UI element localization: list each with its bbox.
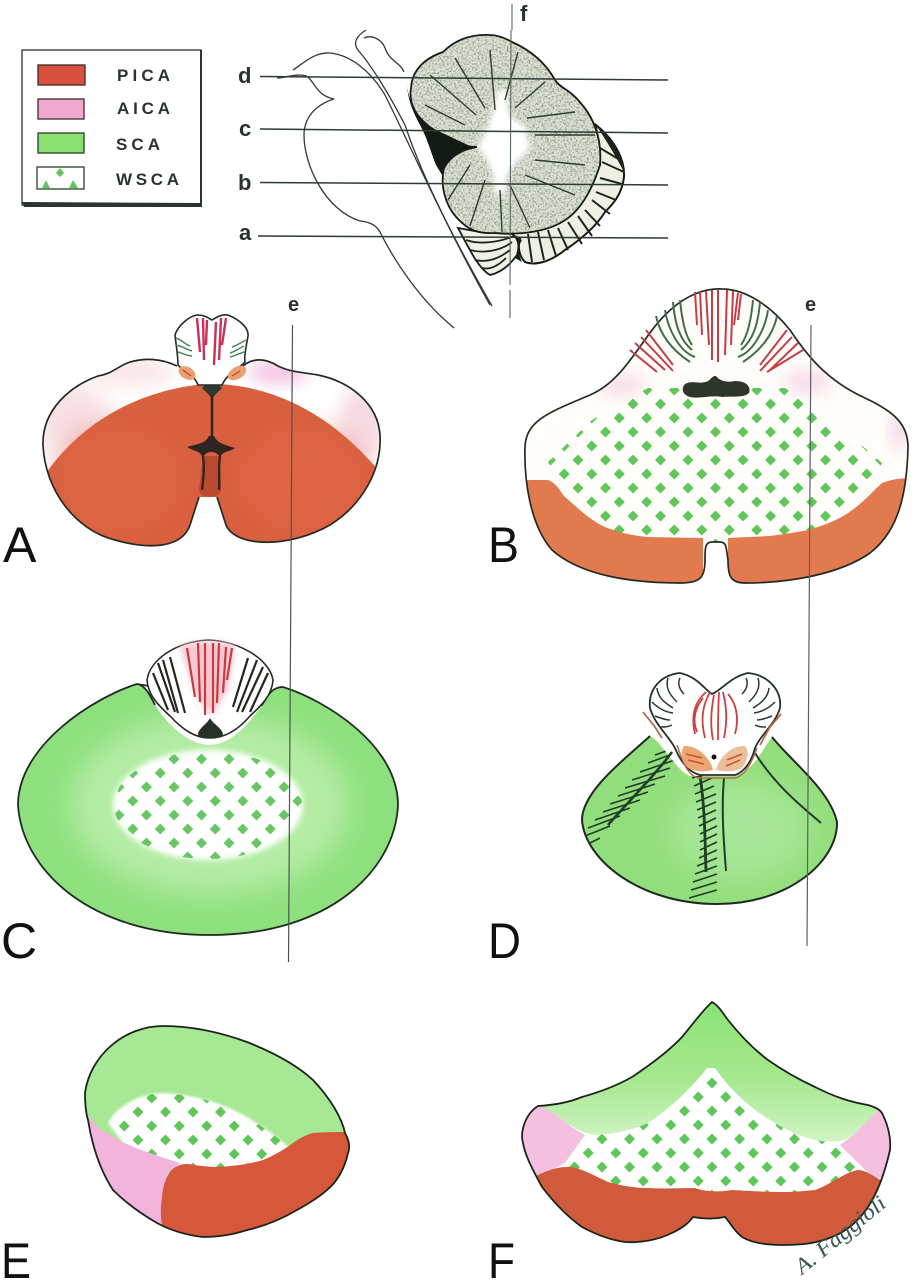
section labels: f [520,1,528,26]
WSCA region E [108,1093,290,1175]
legend swatch: AICA: AICA [117,99,170,118]
cerebellar body [411,36,600,233]
section labels: a [239,220,252,245]
outer folia [500,125,624,264]
vessel lines with hatching [585,748,821,898]
WSCA ellipse [113,750,303,860]
section line e through B and D [807,325,811,946]
PICA band [527,478,905,582]
section lines a to d [258,76,668,238]
dark fissure [407,85,477,175]
PICA fill [48,384,376,545]
brainstem section A [175,315,249,385]
section line f [510,4,512,318]
panel letters: A [3,517,37,573]
brainstem outline [277,30,492,328]
label e right: e [805,294,816,316]
panel E: section e [80,1020,355,1245]
section line e through A and C [288,325,292,962]
PICA region [536,1166,880,1244]
PICA region [160,1132,348,1236]
panel C: section c, SCA territory [10,640,410,945]
legend swatch: AICA [38,99,170,119]
legend [22,50,201,207]
legend swatch: PICA [38,65,170,85]
panel letters [1,517,521,1280]
brainstem section C [147,640,273,738]
signature: A. Faggioli [788,1190,891,1280]
WSCA pattern [548,388,882,545]
panel B: section b [515,280,915,595]
legend swatch: WSCA: WSCA [116,170,179,189]
legend swatch: WSCA [37,167,179,189]
brainstem striations B [630,290,803,372]
AICA region [88,1116,180,1224]
fourth ventricle and vermis [187,378,235,497]
brainstem section D [643,673,781,778]
panel A: section a, PICA territory [42,314,381,547]
AICA regions [522,1106,585,1176]
section labels [238,1,528,245]
legend swatch: SCA [38,133,160,154]
section labels: d [238,63,251,88]
panel letters: B [488,517,519,573]
section labels: b [238,170,251,195]
panel letters: C [1,913,37,969]
panel F: section f [515,1000,900,1255]
label e left: e [288,294,299,316]
legend swatch: PICA: PICA [117,66,170,85]
WSCA region F [552,1068,875,1145]
legend swatch: SCA: SCA [116,135,160,154]
tonsil lobules [458,228,518,275]
sagittal diagram of brainstem and cerebellum [238,1,668,328]
panel D: section d [570,673,850,910]
panel letters: D [488,913,521,969]
fourth ventricle B [683,376,750,398]
section labels: c [239,116,251,141]
